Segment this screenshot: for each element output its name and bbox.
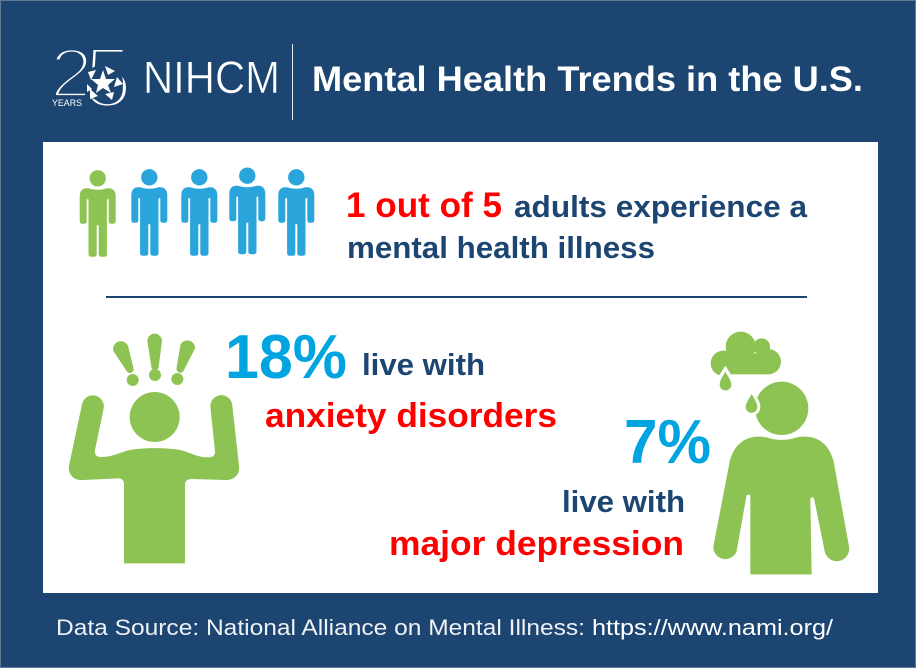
text: 1 out of 5 adults: adults experience a (514, 189, 808, 224)
data source footer: Data Source: National Alliance on Mental Illness: (56, 615, 585, 640)
icon: green person (80, 170, 116, 257)
logo: NIHCM 25 years (50, 30, 280, 126)
logo years label: YEARS (52, 98, 82, 108)
data source footer: https://www.nami.org/ (592, 615, 834, 640)
panel: statistics (43, 142, 878, 593)
text: 18% anxiety: 18% (225, 323, 347, 392)
pictogram: 1 of 5 people (80, 168, 314, 257)
logo star (85, 64, 123, 102)
text: 7% depression: major depression (389, 525, 684, 563)
icon: blue person 4 (229, 168, 265, 254)
title: Mental Health Trends in the U.S. (312, 60, 863, 99)
logo numeral 2: 2 (50, 34, 93, 112)
header divider (292, 44, 293, 120)
text: 1 out of 5 adults (346, 186, 808, 265)
text: 7% depression: 7% (624, 408, 711, 477)
text: 18% anxiety: anxiety disorders (265, 397, 557, 435)
logo wordmark: NIHCM (143, 52, 280, 103)
text: 7% depression (389, 408, 711, 563)
icon: blue person 2 (131, 169, 167, 256)
text: 18% anxiety: live with (362, 347, 485, 382)
icon: anxious person (69, 334, 239, 563)
text: 18% anxiety (225, 323, 557, 435)
text: 1 out of 5 adults: 1 out of 5 (346, 186, 502, 225)
logo numeral 5: 5 (84, 30, 132, 126)
icon: blue person 5 (278, 169, 314, 256)
icon: blue person 3 (181, 169, 217, 256)
text: 1 out of 5 adults: mental health illness (347, 230, 655, 265)
icon: depressed person with rain cloud (711, 332, 849, 574)
text: 7% depression: live with (562, 484, 685, 519)
data source footer (56, 615, 834, 640)
